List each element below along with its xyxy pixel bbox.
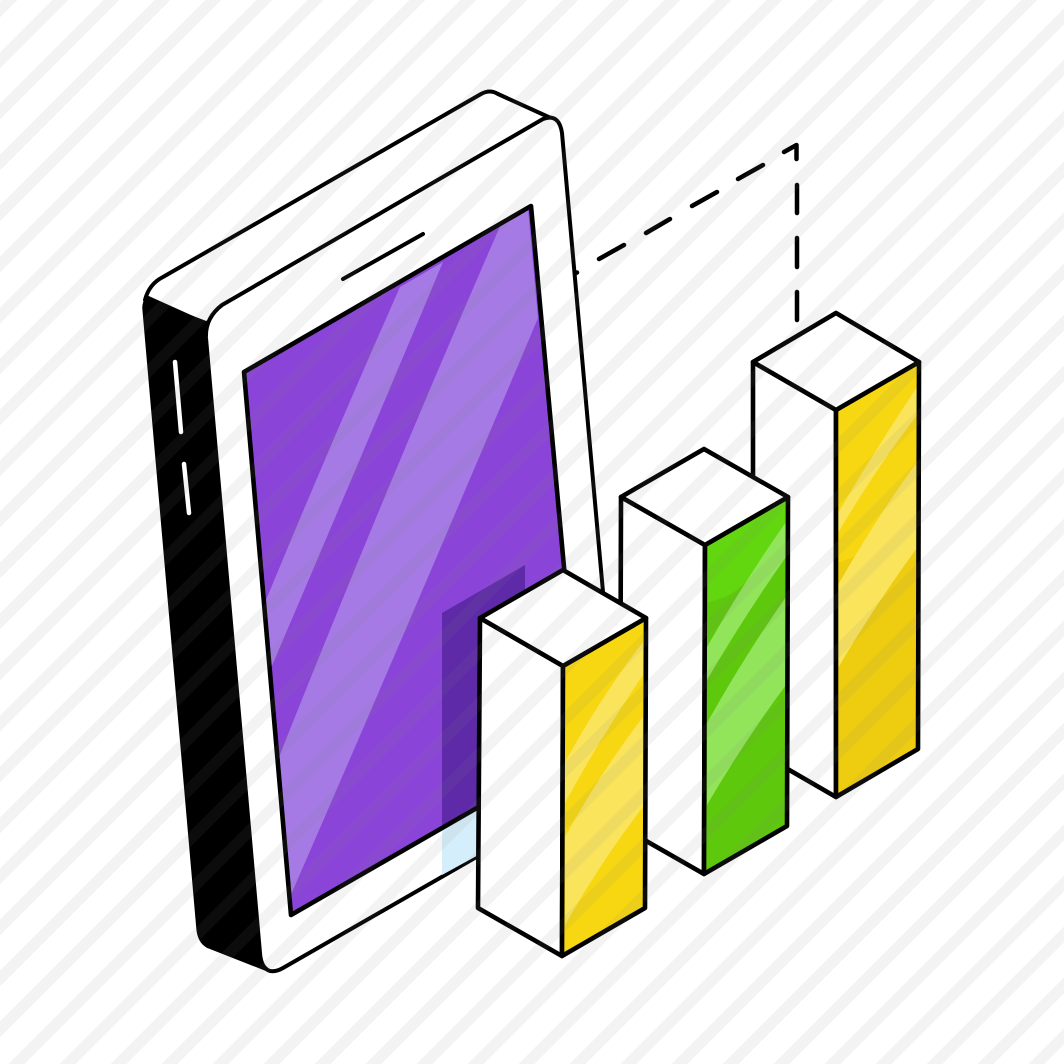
yellow face outline — [562, 618, 646, 956]
front left face — [620, 497, 705, 874]
screen — [244, 206, 570, 915]
device top edge — [145, 92, 553, 323]
bar: tall right — [753, 313, 919, 797]
chart shadow on screen — [442, 565, 525, 830]
screen glare: thin band — [266, 262, 443, 668]
device front outline — [206, 118, 603, 971]
glare bands — [565, 642, 643, 925]
bar: front — [478, 570, 646, 956]
chart shadow on bezel — [442, 803, 482, 875]
device side, black — [143, 296, 268, 971]
device — [143, 92, 604, 971]
darker lower yellow area — [836, 530, 918, 797]
green face outline — [704, 497, 788, 874]
yellow face — [836, 362, 919, 797]
glare bands — [707, 522, 786, 805]
bar: middle — [620, 449, 788, 874]
front left face — [478, 618, 563, 956]
screen glare: wide band — [279, 208, 538, 897]
dashed connector line — [576, 145, 797, 320]
glare bands — [838, 387, 917, 668]
yellow face outline — [836, 362, 919, 797]
top face — [480, 570, 646, 666]
front left face — [753, 362, 836, 797]
top face — [753, 313, 919, 410]
green face — [704, 497, 788, 874]
side buttons — [175, 362, 189, 513]
yellow face — [562, 618, 646, 956]
top face — [621, 449, 788, 545]
device front face — [206, 118, 604, 971]
darker lower green area — [704, 530, 787, 874]
speaker slot — [343, 234, 423, 279]
screen outline — [244, 206, 565, 915]
